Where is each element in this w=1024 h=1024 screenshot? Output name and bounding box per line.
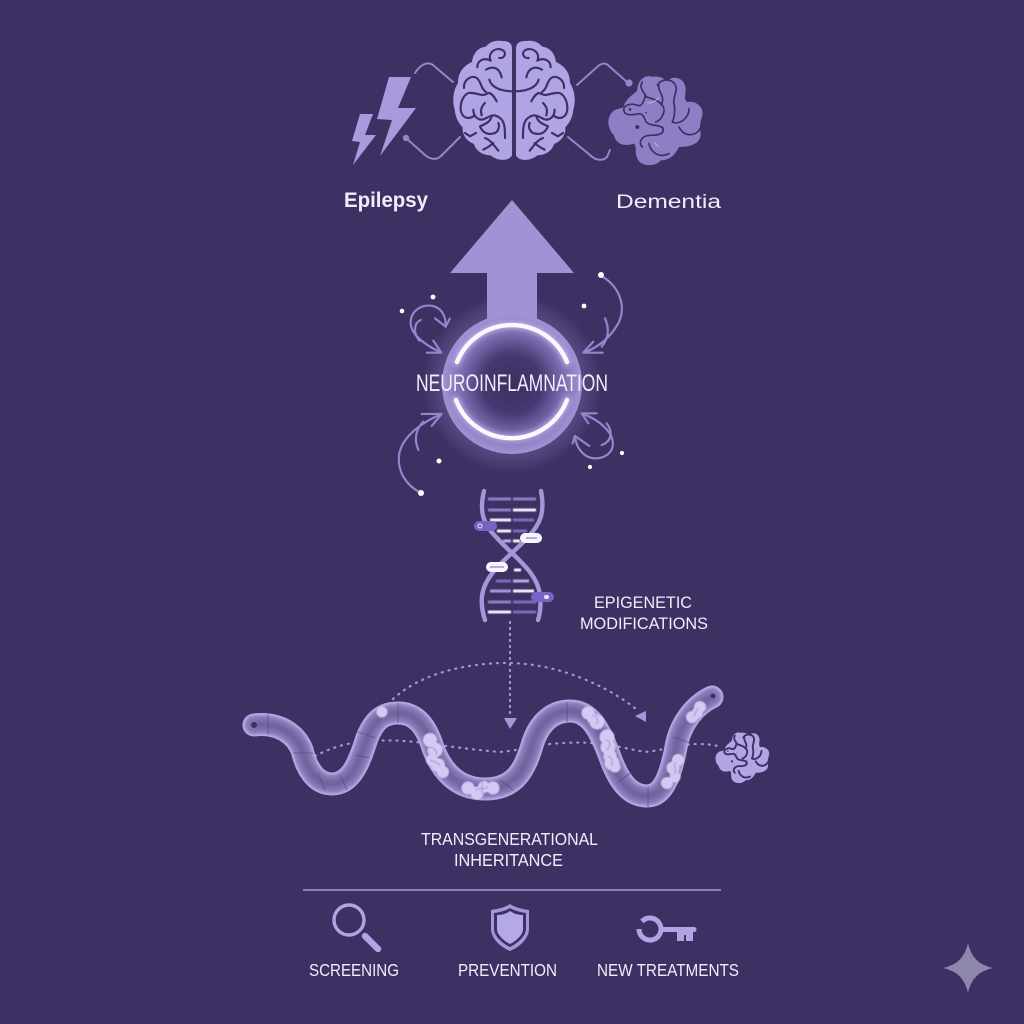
icon: shield [491, 904, 529, 951]
feedback arrows around core [399, 276, 622, 493]
protein clumps in worm [377, 702, 706, 799]
up arrow [450, 200, 574, 325]
label: Screening: SCREENING [309, 960, 399, 980]
glowing ring [456, 325, 567, 438]
dotted line through worm [315, 740, 722, 756]
icon: DNA helix [474, 491, 554, 620]
worm eyes [251, 722, 257, 728]
dotted arrow: DNA to worm [504, 622, 517, 729]
segment lines [268, 702, 690, 807]
label: Transgenerational inheritance [421, 829, 598, 870]
label: Dementia: Dementia [616, 192, 722, 213]
divider [303, 889, 721, 891]
label: Epigenetic modifications: MODIFICATIONS [580, 615, 708, 633]
particles [400, 272, 624, 496]
label: Transgenerational inheritance: INHERITANCE [454, 850, 563, 870]
label: Transgenerational inheritance: TRANSGENERATIONAL [421, 829, 598, 849]
connector: epilepsy to brain [403, 63, 460, 159]
label: Epigenetic modifications: EPIGENETIC [594, 594, 692, 612]
worm C. elegans [251, 694, 715, 807]
icon: degenerated brain [608, 76, 703, 165]
label: Epilepsy: Epilepsy [344, 189, 428, 212]
connector: brain to dementia [568, 64, 633, 160]
rungs [488, 499, 536, 612]
dotted arc: generation to generation [393, 663, 646, 722]
label: Prevention: PREVENTION [458, 960, 557, 980]
watermark star [943, 943, 993, 993]
label: NEUROINFLAMNATION: NEUROINFLAMNATION [416, 370, 608, 397]
icon: small aggregate [715, 732, 769, 783]
label: Epigenetic modifications [580, 594, 708, 633]
neuroinflammation core [422, 294, 602, 474]
icon: healthy brain [453, 41, 575, 160]
label: New treatments: NEW TREATMENTS [597, 960, 739, 980]
tags [474, 521, 497, 531]
icon: lightning bolts [352, 77, 416, 165]
icon: magnifying glass [334, 905, 378, 949]
icon: key [639, 918, 696, 941]
